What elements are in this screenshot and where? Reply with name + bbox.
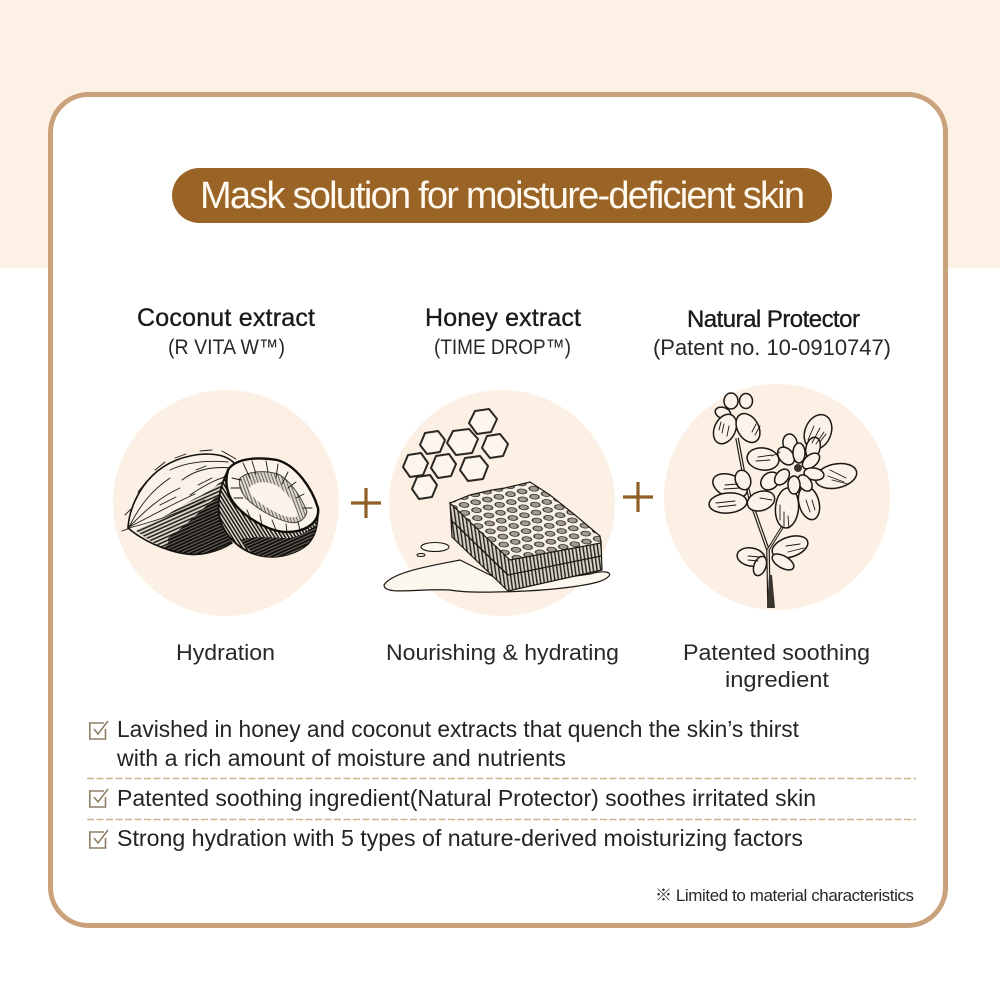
benefit 2: Patented soothing ingredient(Natural Protector) soothes irritated skin (117, 785, 816, 811)
benefit 1 (90, 716, 799, 771)
column: honey extract heading: (TIME DROP™) (434, 336, 571, 359)
icon: plus (623, 482, 653, 512)
whole coconut (122, 450, 240, 555)
column: natural protector heading: Natural Protector (687, 306, 860, 333)
benefit 1: with a rich amount of moisture and nutrients (116, 745, 566, 771)
label: nourishing and hydrating: Nourishing & hydrating (386, 640, 619, 665)
footnote: ※ Limited to material characteristics (655, 886, 914, 905)
main card (50, 94, 946, 926)
label: patented soothing ingredient: Patented soothing (683, 640, 870, 665)
icon: checkbox (90, 830, 108, 848)
column: natural protector heading (653, 306, 891, 360)
icon: plus (351, 488, 381, 518)
column: honey extract heading: Honey extract (425, 304, 581, 332)
column: coconut extract heading: Coconut extract (137, 304, 315, 332)
column: coconut extract heading: (R VITA W™) (168, 336, 285, 359)
column: natural protector heading: (Patent no. 10-0910747) (653, 335, 891, 360)
icon: checkbox (90, 789, 108, 807)
icon: honeycomb (384, 390, 615, 616)
icon: clover plant (664, 384, 890, 610)
top background band (0, 0, 1000, 268)
label: patented soothing ingredient (683, 640, 870, 692)
column: coconut extract heading (137, 304, 315, 359)
label: patented soothing ingredient: ingredient (725, 667, 829, 692)
benefit 3: Strong hydration with 5 types of nature-derived moisturizing factors (117, 825, 803, 851)
title pill: Mask solution for moisture-deficient skin (200, 175, 805, 217)
column: honey extract heading (425, 304, 581, 359)
icon: checkbox (90, 721, 108, 739)
coconut half (219, 458, 318, 557)
icon: coconut (113, 390, 339, 616)
label: hydration: Hydration (176, 640, 275, 665)
benefit 1: Lavished in honey and coconut extracts that quench the skin’s thirst (117, 716, 799, 742)
